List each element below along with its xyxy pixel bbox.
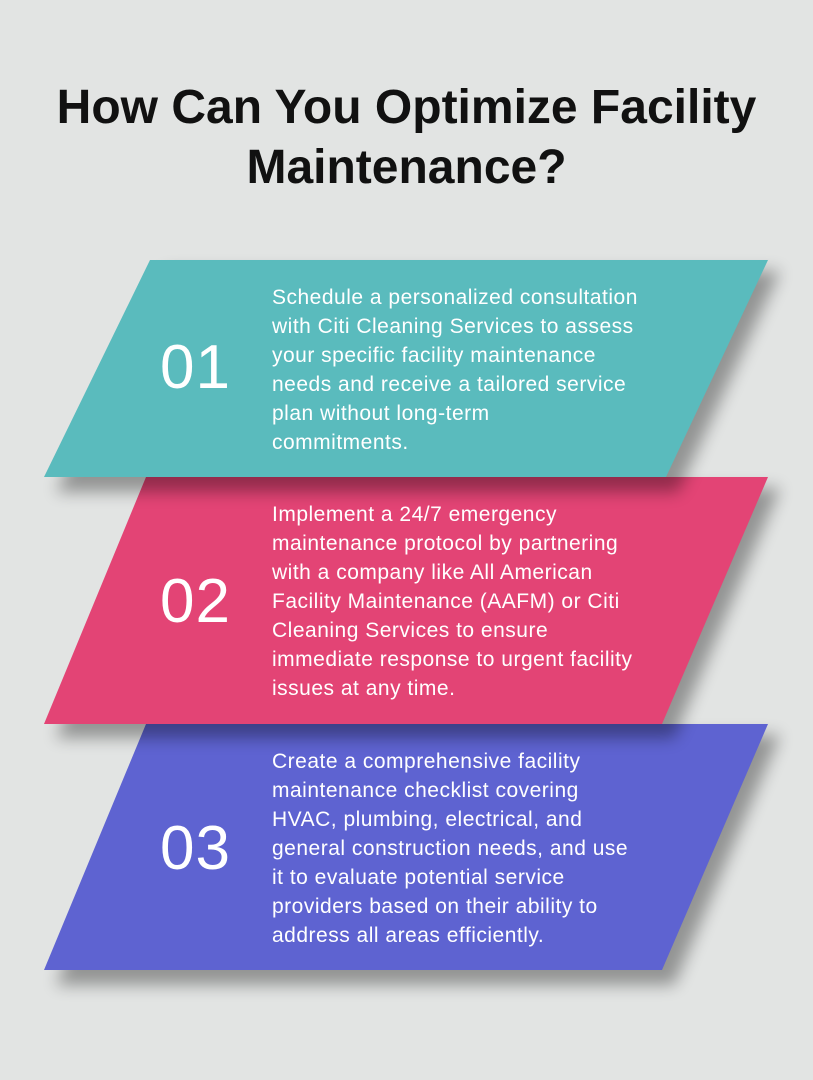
panel 2 number: 02	[160, 567, 231, 636]
title	[57, 81, 756, 194]
panel 3 text: providers based on their ability to	[272, 895, 598, 918]
panel 3 shape	[44, 724, 768, 970]
panel 1 number: 01	[160, 333, 231, 402]
panel 3 text: it to evaluate potential service	[272, 866, 565, 889]
panel 2 text: Facility Maintenance (AAFM) or Citi	[272, 590, 620, 613]
panel 3 text: HVAC, plumbing, electrical, and	[272, 808, 582, 831]
panel 3 number: 03	[160, 814, 231, 883]
panel 2 shape	[44, 477, 768, 724]
panel 2 text: with a company like All American	[272, 561, 593, 584]
panel 1 text: with Citi Cleaning Services to assess	[272, 315, 634, 338]
panel 2 text: immediate response to urgent facility	[272, 648, 632, 671]
panel 1 text	[272, 286, 638, 454]
panel 2 text: maintenance protocol by partnering	[272, 532, 618, 555]
panel 3 text: general construction needs, and use	[272, 837, 628, 860]
panel 2 text	[272, 503, 632, 700]
title: How Can You Optimize Facility	[57, 81, 756, 134]
panel 1 text: your specific facility maintenance	[272, 344, 596, 367]
panel 1 text: plan without long-term	[272, 402, 490, 425]
panel 1 shape	[44, 260, 768, 477]
panel 2 text: issues at any time.	[272, 677, 455, 700]
panel 1 text: needs and receive a tailored service	[272, 373, 626, 396]
panel 3 text: address all areas efficiently.	[272, 924, 544, 947]
panel 1 text: Schedule a personalized consultation	[272, 286, 638, 309]
panel 2 text: Cleaning Services to ensure	[272, 619, 548, 642]
panel 3 text: maintenance checklist covering	[272, 779, 579, 802]
panel 3 text: Create a comprehensive facility	[272, 750, 580, 773]
panel 1 text: commitments.	[272, 431, 409, 454]
title: Maintenance?	[246, 141, 567, 194]
panel 3 text	[272, 750, 628, 947]
panel 2 text: Implement a 24/7 emergency	[272, 503, 557, 526]
